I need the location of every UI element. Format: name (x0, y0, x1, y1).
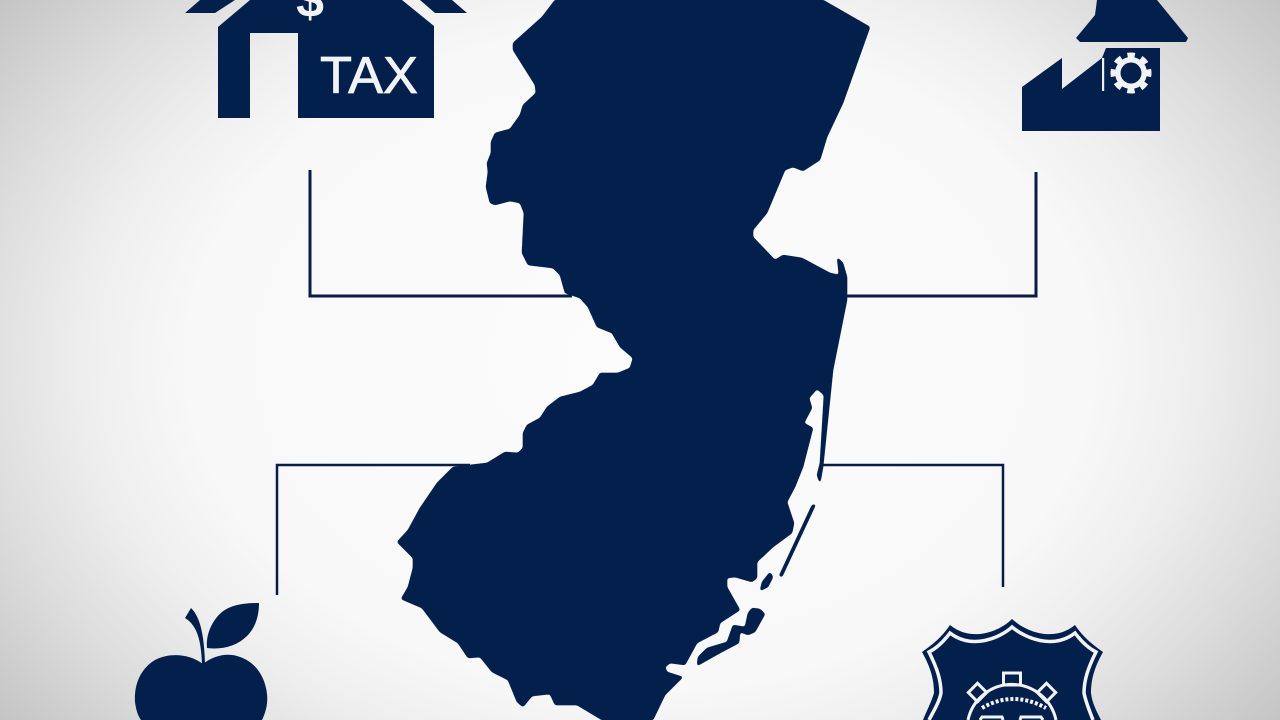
house body (218, 0, 434, 118)
icon: police badge (922, 619, 1103, 720)
left roof eave (185, 0, 235, 13)
barrier island: long strip (779, 504, 816, 577)
factory roof shape (1076, 0, 1188, 42)
apple leaf (207, 603, 259, 648)
connector: industry to map (846, 172, 1036, 296)
tax label: TAX (320, 47, 418, 105)
apple body (135, 655, 267, 720)
connector: public safety to map (822, 465, 1003, 587)
badge shield (922, 619, 1103, 720)
apple stem (185, 608, 205, 664)
white divider (1102, 58, 1104, 91)
barrier island: southern (697, 608, 765, 666)
connector: tax to map (310, 170, 572, 296)
barrier island: small (760, 572, 773, 591)
factory building (1022, 48, 1160, 131)
icon: factory with gear (1022, 0, 1188, 131)
icon: apple (135, 603, 267, 720)
right roof eave (420, 0, 467, 13)
icon: house with tax label (185, 0, 467, 118)
badge inner outline (929, 627, 1096, 720)
map: New Jersey silhouette (397, 0, 870, 720)
badge gear emblem (968, 673, 1056, 720)
gear (1110, 52, 1152, 94)
connector: education to map (277, 465, 470, 595)
